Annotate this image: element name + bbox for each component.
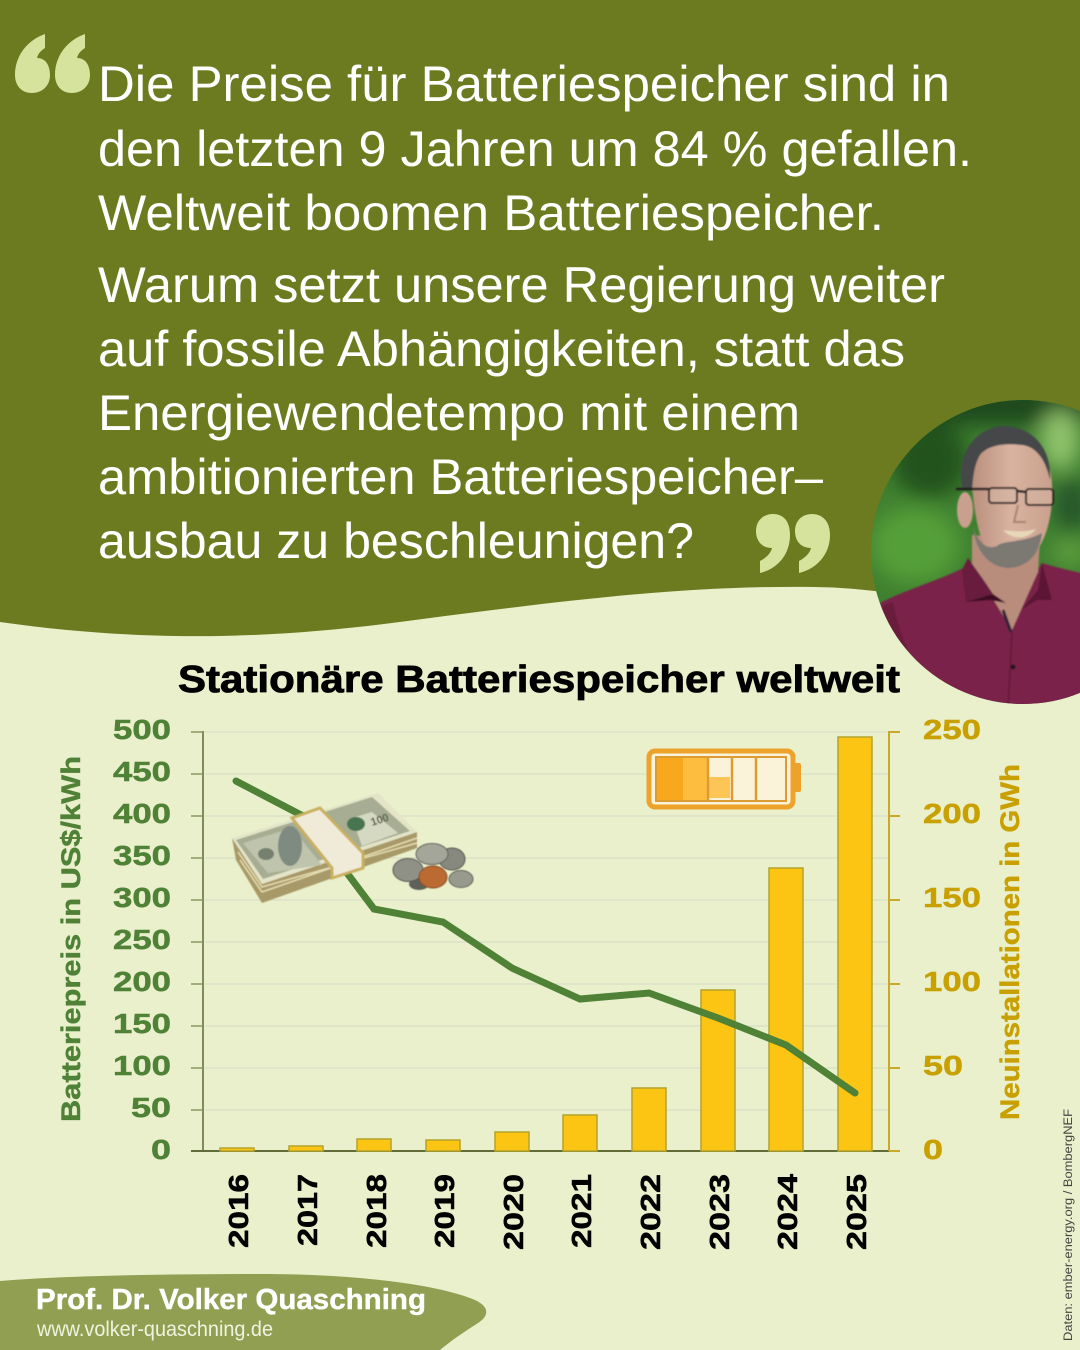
quote text: ambitionierten Batteriespeicher– [98,449,823,505]
right axis labels [923,714,981,1165]
icon: stack of dollar bills [232,793,417,903]
year labels [223,1173,872,1250]
year labels: 2021 [566,1174,597,1248]
author name: Prof. Dr. Volker Quaschning [36,1284,426,1316]
icon: stack of dollar bills: 100 [369,812,390,829]
left axis labels: 0 [151,1134,171,1165]
quote text: den letzten 9 Jahren um 84 % gefallen. [98,121,972,177]
right axis labels: 0 [923,1134,943,1165]
left axis title: Batteriepreis in US$/kWh [56,756,86,1122]
chart title: Stationäre Batteriespeicher weltweit [178,659,900,701]
data source: Daten: ember-energy.org / BombergNEF [1063,1109,1075,1341]
year labels: 2023 [704,1174,735,1250]
right axis labels: 200 [923,798,981,829]
footer badge [0,1274,486,1350]
left axis labels: 150 [113,1008,171,1039]
right axis labels: 250 [923,714,981,745]
quote text: auf fossile Abhängigkeiten, statt das [98,321,905,377]
icon: coins [393,844,473,890]
year labels: 2024 [772,1173,803,1250]
beard [973,526,1042,568]
left axis labels: 250 [113,924,171,955]
face [971,443,1054,548]
quote text: Warum setzt unsere Regierung weiter [98,257,945,313]
right axis labels: 100 [923,966,981,997]
glasses [989,488,1053,505]
left axis labels: 500 [113,714,171,745]
website: www.volker-quaschning.de [36,1318,273,1341]
left axis labels: 450 [113,756,171,787]
year labels: 2018 [361,1174,392,1248]
left axis labels: 350 [113,840,171,871]
nose and mouth [1014,505,1026,522]
year labels: 2019 [429,1174,460,1248]
left axis labels: 50 [131,1092,171,1123]
portrait photo [871,400,1080,704]
shirt placket and button [1003,610,1011,632]
quote text: Weltweit boomen Batteriespeicher. [98,185,884,241]
left axis labels: 200 [113,966,171,997]
quote mark: closing [756,514,830,573]
chart: plot grid and axes [191,731,900,1151]
quote text: Energiewendetempo mit einem [98,385,800,441]
header panel: olive wave background [0,0,1080,640]
hair [961,426,1050,490]
year labels: 2022 [635,1174,666,1250]
left axis labels [113,714,171,1165]
year labels: 2025 [841,1174,872,1250]
collar [962,558,993,602]
year labels: 2020 [498,1174,529,1250]
icon: battery [649,751,801,807]
ear [957,492,973,528]
quote mark: opening [15,34,90,93]
left axis labels: 400 [113,798,171,829]
left axis labels: 100 [113,1050,171,1081]
bar chart: installations per year [220,737,872,1151]
neck [972,535,1040,630]
left axis labels: 300 [113,882,171,913]
line chart: battery price [236,781,855,1093]
right axis title: Neuinstallationen in GWh [995,764,1025,1120]
year labels: 2016 [223,1174,254,1248]
right axis labels: 150 [923,882,981,913]
quote text: ausbau zu beschleunigen? [98,513,694,569]
right axis labels: 50 [923,1050,963,1081]
quote text: Die Preise für Batteriespeicher sind in [98,56,950,112]
quote text [98,56,972,569]
shirt [880,563,1080,710]
year labels: 2017 [292,1174,323,1246]
